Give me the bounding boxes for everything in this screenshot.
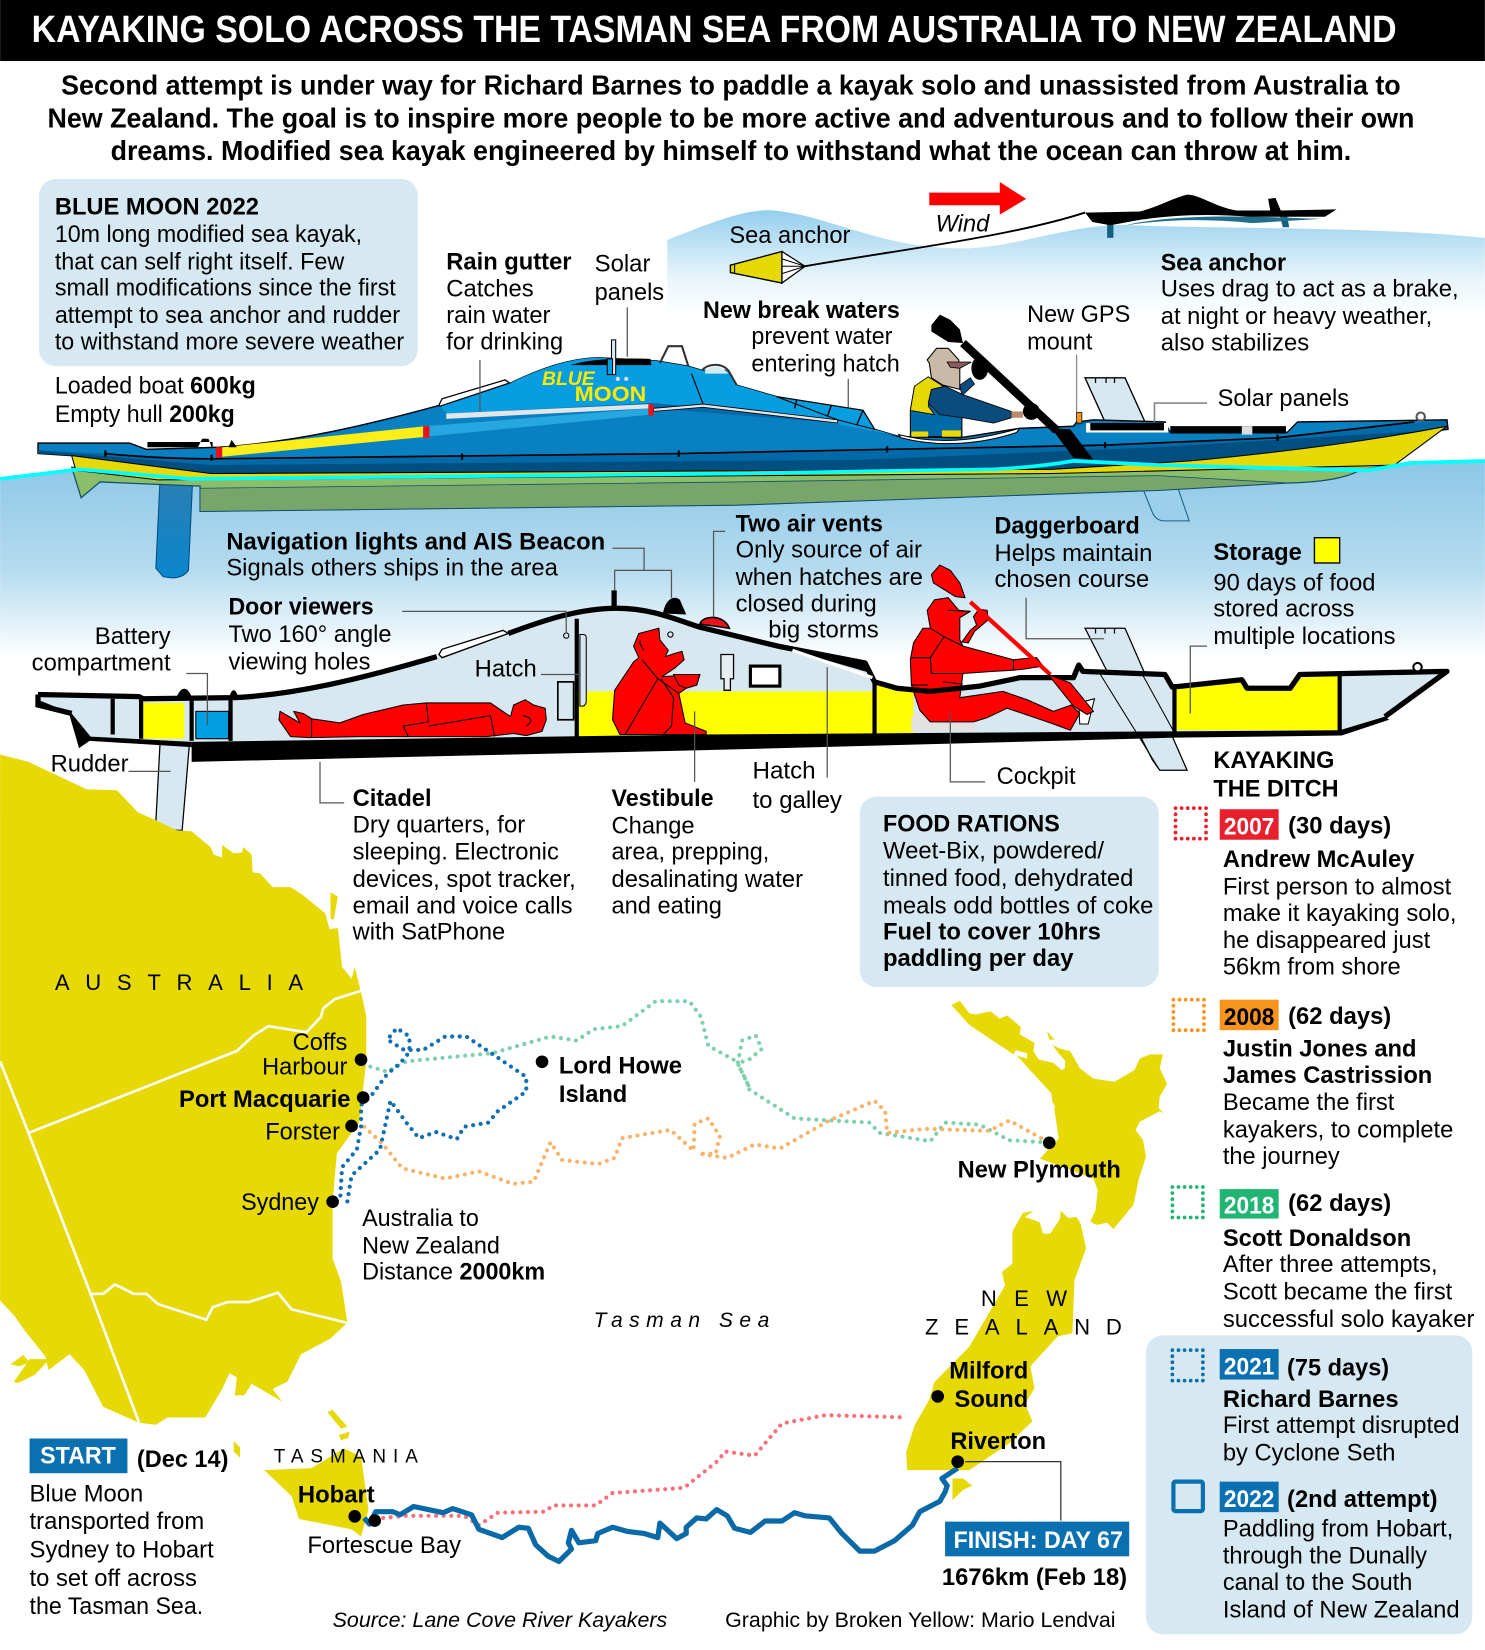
intro text	[47, 70, 1414, 166]
panel: food rations: paddling per day	[883, 946, 1074, 972]
label: vestibule: Vestibule	[611, 786, 714, 812]
panel: food rations	[860, 797, 1159, 987]
yellow hull	[72, 426, 1447, 480]
panel: food rations: tinned food, dehydrated	[883, 866, 1133, 892]
start callout: transported from	[30, 1509, 204, 1535]
label: storage	[1190, 538, 1395, 713]
label: new break waters: prevent water	[751, 324, 893, 350]
label: cockpit	[950, 713, 1076, 790]
legend 2021: (75 days)	[1287, 1355, 1389, 1381]
title	[0, 0, 1485, 61]
intro text: New Zealand. The goal is to inspire more people to be more active and adventurous and to follow their own	[47, 102, 1414, 133]
Fraser Island	[331, 892, 338, 920]
map label: Lord Howe Island: Island	[559, 1082, 627, 1108]
legend 2021: 2021	[1224, 1354, 1274, 1380]
intro text: Second attempt is under way for Richard Barnes to paddle a kayak solo and unassisted from Australia to	[61, 70, 1401, 101]
label: hatch to galley: to galley	[752, 788, 842, 814]
legend 2007: 56km from shore	[1223, 954, 1401, 980]
route 2008 orange	[364, 1101, 1045, 1184]
Tasmania	[264, 1448, 368, 1537]
break water	[778, 646, 872, 673]
exterior rudder	[156, 479, 193, 578]
map labels: New Zealand: New Plymouth	[958, 1158, 1121, 1184]
section view rudder	[156, 743, 190, 830]
legend 2008: James Castrission	[1223, 1063, 1432, 1089]
finish callout: 1676km (Feb 18)	[942, 1565, 1127, 1591]
map south land and routes	[0, 991, 1086, 1561]
label: vestibule: Change	[611, 813, 695, 839]
label: solar panels right	[1154, 386, 1349, 422]
legend 2021	[1172, 1349, 1460, 1467]
label: hatch	[475, 657, 581, 683]
heading: kayaking the ditch	[1213, 748, 1339, 803]
label: two air vents: Only source of air	[736, 538, 922, 564]
label: door viewers	[228, 595, 566, 675]
boat name: BLUE	[542, 369, 596, 390]
map labels: New Zealand: Milford	[949, 1359, 1028, 1385]
label: citadel: Dry quarters, for	[353, 812, 525, 838]
map labels: Australia side: Harbour	[262, 1054, 347, 1080]
legend 2008: kayakers, to complete	[1223, 1118, 1453, 1144]
legend 2018: successful solo kayaker	[1223, 1307, 1474, 1333]
legend 2007: Andrew McAuley	[1223, 847, 1415, 873]
legend 2021: Richard Barnes	[1223, 1387, 1399, 1413]
label: solar panels top	[595, 251, 664, 357]
map labels: Australia side: Forster	[265, 1120, 340, 1146]
label: sea anchor: Uses drag to act as a brake,	[1161, 277, 1459, 303]
legend 2007: make it kayaking solo,	[1223, 901, 1456, 927]
label: cockpit: Cockpit	[997, 764, 1076, 790]
legend 2008: 2008	[1224, 1005, 1274, 1031]
kayak silhouette at sea	[1085, 195, 1337, 238]
keel	[192, 717, 1389, 762]
mid blue band	[39, 406, 1442, 459]
distance note: Australia to	[362, 1206, 479, 1232]
label: new GPS mount: New GPS	[1027, 302, 1130, 328]
legend 2008	[1173, 1000, 1453, 1170]
hatch door	[558, 682, 574, 720]
seat	[911, 710, 976, 731]
label: citadel: Citadel	[353, 786, 432, 812]
panel: Blue Moon 2022: attempt to sea anchor and rudder	[55, 303, 400, 329]
legend 2008: the journey	[1223, 1144, 1340, 1170]
upper deck cyan	[440, 358, 900, 437]
label: two air vents: big storms	[768, 618, 879, 644]
finish callout: FINISH: DAY 67	[953, 1528, 1123, 1554]
label: battery compartment: compartment	[32, 650, 171, 676]
map land	[0, 754, 1167, 1425]
kayak cross section	[38, 565, 1447, 770]
finish callout	[942, 1522, 1129, 1591]
label: new GPS mount	[1027, 302, 1130, 412]
rear hatch covers	[660, 346, 737, 385]
battery	[196, 711, 228, 739]
panel: food rations: FOOD RATIONS	[883, 811, 1060, 837]
label: sea anchor	[1161, 250, 1459, 356]
top paddler	[899, 315, 1093, 460]
distance note: New Zealand	[362, 1233, 500, 1259]
distance note	[362, 1206, 545, 1286]
seated figure	[613, 628, 706, 735]
legend 2007: 2007	[1224, 814, 1274, 840]
Australian state borders	[0, 991, 361, 1422]
label: sea anchor: at night or heavy weather,	[1161, 304, 1432, 330]
legend 2022: Paddling from Hobart,	[1223, 1516, 1453, 1542]
legend 2022: through the Dunally	[1223, 1544, 1427, 1570]
legend 2018: After three attempts,	[1223, 1252, 1438, 1278]
label: hatch: Hatch	[475, 657, 537, 683]
start callout	[30, 1438, 228, 1620]
panel: Blue Moon 2022: BLUE MOON 2022	[55, 195, 259, 221]
panel: Blue Moon 2022	[39, 179, 418, 366]
label: daggerboard: Daggerboard	[995, 514, 1140, 540]
legend 2018: (62 days)	[1288, 1191, 1391, 1217]
legend 2022: (2nd attempt)	[1287, 1487, 1438, 1513]
panel: Blue Moon 2022: 10m long modified sea kayak,	[55, 222, 362, 248]
red paddle	[931, 565, 1093, 715]
label: solar panels right: Solar panels	[1218, 386, 1349, 412]
daggerboard lines through hull	[1100, 673, 1177, 770]
map labels: Tasmania: TASMANIA	[274, 1447, 418, 1468]
hull blue	[38, 358, 1448, 474]
legend 2008: Became the first	[1223, 1090, 1395, 1116]
panel: 2021 and 2022 attempts	[1146, 1335, 1472, 1634]
label: rain gutter: Rain gutter	[446, 249, 572, 275]
label: navigation lights: Signals others ships in the area	[226, 556, 559, 582]
legend 2007: he disappeared just	[1223, 928, 1431, 954]
label: storage: multiple locations	[1213, 624, 1395, 650]
label: storage: Storage	[1213, 540, 1302, 566]
lower dark band	[38, 429, 1448, 474]
water bottle and tablet	[721, 655, 734, 690]
section view daggerboard back	[1085, 628, 1187, 770]
heading: kayaking the ditch: THE DITCH	[1213, 777, 1339, 803]
map labels: New Zealand: Riverton	[950, 1429, 1046, 1455]
New Zealand north island	[951, 1001, 1167, 1229]
deck line	[105, 422, 1414, 459]
label: two air vents: Two air vents	[736, 511, 883, 537]
stern skeg	[38, 700, 192, 748]
stern cap	[38, 695, 72, 713]
heading: kayaking the ditch: KAYAKING	[1213, 748, 1334, 774]
weights text: Loaded boat 600kg	[55, 374, 256, 400]
start callout: Sydney to Hobart	[30, 1537, 214, 1563]
stripes	[222, 426, 426, 457]
door viewer holes	[564, 633, 569, 638]
label: daggerboard	[995, 514, 1152, 639]
label: door viewers: Two 160° angle	[228, 622, 392, 648]
map labels: New Zealand	[925, 1158, 1122, 1521]
label: two air vents: when hatches are	[735, 565, 923, 591]
label: citadel: with SatPhone	[352, 920, 505, 946]
deck outline	[38, 608, 1447, 717]
route 2022 blue solid	[364, 1468, 958, 1561]
label: new break waters	[703, 298, 900, 407]
label: new break waters: New break waters	[703, 298, 900, 324]
route 2021 blue	[340, 1028, 526, 1201]
islands	[11, 1355, 349, 1458]
sea anchor illustration	[729, 213, 1085, 283]
map labels: Australia side: Sydney	[241, 1190, 319, 1216]
label: vestibule: desalinating water	[611, 867, 803, 893]
sea surface behind sea anchor	[667, 210, 1485, 316]
label: hatch to galley	[752, 667, 842, 814]
label: vestibule	[611, 711, 803, 919]
label: battery compartment	[32, 624, 207, 725]
yellow storage	[141, 676, 1339, 743]
lying figure	[279, 700, 546, 738]
label: solar panels top: Solar	[595, 251, 651, 277]
legend 2022	[1173, 1482, 1460, 1623]
label: daggerboard: chosen course	[995, 567, 1149, 593]
leader: rain gutter	[479, 360, 481, 411]
legend 2021: First attempt disrupted	[1223, 1413, 1460, 1439]
map labels: Australia side: AUSTRALIA	[55, 970, 303, 995]
weights text: Empty hull 200kg	[55, 402, 235, 428]
wind arrow	[929, 182, 1026, 238]
water band behind kayak	[0, 461, 1485, 658]
graphic credit: Graphic by Broken Yellow: Mario Lendvai	[725, 1607, 1116, 1632]
map labels: New Zealand: Sound	[955, 1387, 1028, 1413]
map labels: Australia side	[55, 970, 351, 1216]
map labels: New Zealand: NEW	[981, 1286, 1067, 1311]
legend 2018: Scott Donaldson	[1223, 1226, 1411, 1252]
start callout: Blue Moon	[30, 1482, 143, 1508]
map labels: Australia side: Coffs	[293, 1030, 347, 1056]
sea anchor illustration: Sea anchor	[729, 223, 850, 249]
label: rain gutter	[446, 249, 572, 355]
route 2018 green	[363, 1001, 1045, 1142]
label: citadel: sleeping. Electronic	[353, 840, 559, 866]
label: rain gutter: rain water	[446, 303, 551, 329]
panel: Blue Moon 2022: small modifications since the first	[55, 276, 396, 302]
antennas and vents	[611, 590, 686, 615]
route 2007 red	[383, 1415, 900, 1525]
footrest	[1079, 699, 1094, 724]
label: sea anchor: also stabilizes	[1161, 330, 1309, 356]
label: storage: 90 days of food	[1213, 570, 1375, 596]
legend 2007: First person to almost	[1223, 874, 1452, 900]
solar panels strip	[1086, 423, 1168, 432]
front part of daggerboard	[1105, 673, 1166, 733]
legend 2022: Island of New Zealand	[1223, 1597, 1460, 1623]
exterior kayak: MOON	[575, 383, 646, 406]
map label: Tasman Sea: Tasman Sea	[594, 1309, 769, 1332]
label: rain gutter: Catches	[446, 277, 534, 303]
label: navigation lights	[226, 529, 671, 598]
waterline	[0, 461, 1485, 479]
legend 2018	[1172, 1187, 1474, 1333]
map place dots	[326, 1053, 1056, 1527]
rear solar panel	[1085, 378, 1145, 422]
label: sea anchor: Sea anchor	[1161, 250, 1286, 276]
label: rain gutter: for drinking	[446, 329, 563, 355]
start callout: START	[40, 1444, 116, 1470]
label: citadel: devices, spot tracker,	[353, 867, 576, 893]
label: navigation lights: Navigation lights and AIS Beacon	[226, 529, 605, 555]
label: citadel: email and voice calls	[353, 893, 573, 919]
wind arrow: Wind	[936, 212, 990, 238]
paddling figure	[910, 598, 1080, 730]
label: two air vents	[714, 511, 923, 644]
map label: Lord Howe Island	[559, 1053, 682, 1108]
label: rudder	[51, 751, 171, 777]
hull below water	[72, 463, 1394, 511]
legend 2007: (30 days)	[1288, 813, 1391, 839]
label: daggerboard: Helps maintain	[995, 541, 1152, 567]
rain gutter cover	[439, 380, 509, 406]
start callout: to set off across	[30, 1566, 197, 1592]
panel: food rations: Fuel to cover 10hrs	[883, 920, 1101, 946]
label: new break waters: entering hatch	[751, 351, 900, 377]
legend 2008: (62 days)	[1288, 1004, 1391, 1030]
distance note: Distance 2000km	[362, 1260, 545, 1286]
legend 2021: by Cyclone Seth	[1223, 1441, 1395, 1467]
label: door viewers: Door viewers	[228, 595, 374, 621]
label: battery compartment: Battery	[95, 624, 171, 650]
Australia	[0, 754, 366, 1425]
label: new GPS mount: mount	[1027, 329, 1093, 355]
label: citadel	[320, 762, 576, 946]
exterior kayak	[38, 340, 1448, 511]
intro text: dreams. Modified sea kayak engineered by himself to withstand what the ocean can throw at him.	[111, 135, 1351, 166]
map labels: Tasmania	[274, 1447, 461, 1559]
label: vestibule: area, prepping,	[611, 840, 769, 866]
map labels: Tasmania: Fortescue Bay	[307, 1533, 461, 1559]
legend 2022: canal to the South	[1223, 1570, 1412, 1596]
label: two air vents: closed during	[736, 591, 877, 617]
solar top	[570, 358, 651, 365]
map labels: Australia side: Port Macquarie	[179, 1087, 351, 1113]
label: rudder: Rudder	[51, 751, 129, 777]
legend 2022: 2022	[1224, 1487, 1274, 1513]
legend 2007	[1176, 808, 1456, 980]
start callout: the Tasman Sea.	[30, 1594, 203, 1620]
rain hatch cover	[439, 630, 508, 658]
New Zealand south island	[906, 1211, 1086, 1500]
label: vestibule: and eating	[611, 893, 722, 919]
start callout: (Dec 14)	[137, 1447, 228, 1473]
map labels: New Zealand: ZEALAND	[925, 1314, 1122, 1339]
interior	[38, 608, 1447, 742]
legend 2018: Scott became the first	[1223, 1280, 1453, 1306]
legend 2018: 2018	[1224, 1193, 1274, 1219]
panel: food rations: Weet-Bix, powdered/	[883, 839, 1104, 865]
weights text	[55, 374, 256, 428]
map labels: Tasmania: Hobart	[298, 1483, 375, 1509]
legend 2008: Justin Jones and	[1223, 1037, 1416, 1063]
label: door viewers: viewing holes	[228, 649, 371, 675]
label: storage: stored across	[1213, 597, 1354, 623]
source credit: Source: Lane Cove River Kayakers	[333, 1607, 667, 1632]
panel: Blue Moon 2022: that can self right itself. Few	[55, 249, 345, 275]
panel: food rations: meals odd bottles of coke	[883, 893, 1153, 919]
daggerboard under exterior kayak	[1142, 484, 1189, 521]
label: hatch to galley: Hatch	[752, 759, 816, 785]
map label: Lord Howe Island: Lord Howe	[559, 1053, 682, 1079]
panel: Blue Moon 2022: to withstand more severe weather	[55, 329, 404, 355]
walls	[113, 619, 1340, 741]
label: solar panels top: panels	[595, 280, 664, 306]
